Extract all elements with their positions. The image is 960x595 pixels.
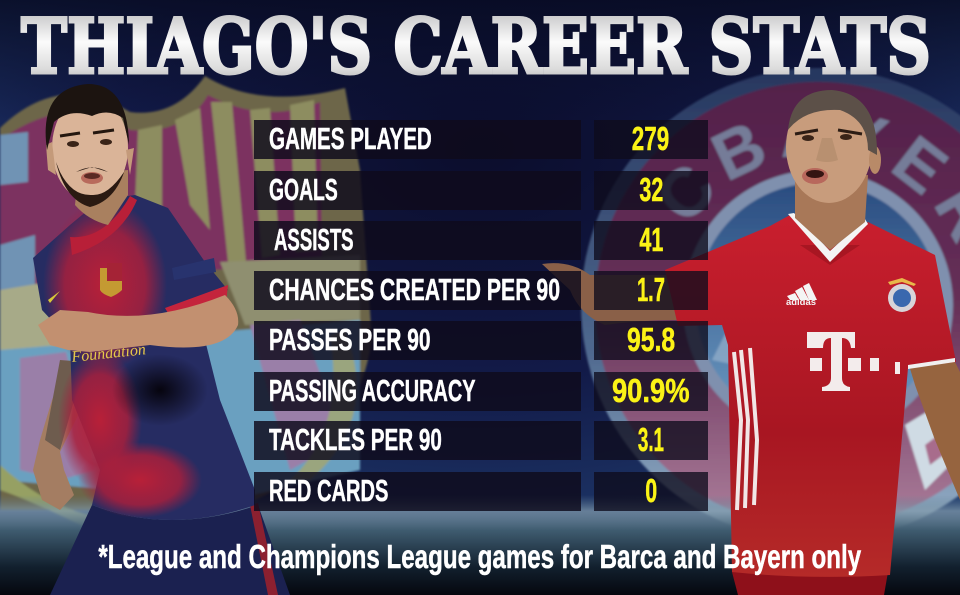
footnote: *League and Champions League games for Barca and Bayern only [99, 538, 861, 575]
value: goals [594, 171, 708, 210]
value: passes: 95.8 [627, 321, 675, 358]
telekom logo [807, 332, 855, 391]
value: tackles: 3.1 [638, 421, 664, 458]
row: games played: GAMES PLAYED [269, 121, 432, 156]
head [786, 91, 872, 203]
Bayern crest backdrop [580, 67, 960, 525]
row: tackles: TACKLES PER 90 [269, 422, 442, 457]
value: goals: 32 [639, 171, 663, 208]
kit stripes [734, 348, 757, 510]
value: tackles [594, 421, 708, 460]
bayern crest [888, 278, 916, 312]
arm [542, 263, 680, 325]
value: assists [594, 221, 708, 260]
right arm [908, 362, 960, 500]
club crest [100, 268, 122, 297]
shorts [50, 505, 290, 595]
right player [542, 90, 960, 595]
row: red cards: RED CARDS [269, 473, 388, 508]
row: assists: ASSISTS [274, 222, 354, 257]
value: chances created: 1.7 [637, 271, 665, 308]
face [52, 95, 128, 201]
left player [33, 84, 290, 595]
row: passes [254, 321, 581, 360]
row: red cards [254, 472, 581, 511]
row: chances created: CHANCES CREATED PER 90 [269, 272, 560, 307]
row: tackles [254, 421, 581, 460]
value: passing accuracy [594, 372, 708, 411]
value: assists: 41 [639, 221, 663, 258]
shirt [665, 215, 956, 577]
value: games played: 279 [632, 120, 670, 157]
value: passing accuracy: 90.9% [612, 372, 690, 409]
row: goals: GOALS [269, 172, 338, 207]
value: chances created [594, 271, 708, 310]
value: games played [594, 120, 708, 159]
Bottom stadium [0, 495, 960, 595]
row: games played [254, 120, 581, 159]
row: goals [254, 171, 581, 210]
row: assists [254, 221, 581, 260]
value: passes [594, 321, 708, 360]
sponsor text: Foundation [70, 341, 147, 366]
neck [75, 170, 128, 225]
row: passing accuracy [254, 372, 581, 411]
shirt [33, 195, 255, 520]
shorts [732, 572, 888, 595]
Barca crest backdrop [0, 76, 372, 530]
sleeve badge: respect [172, 258, 216, 280]
adidas logo: adidas [786, 297, 816, 307]
row: passes: PASSES PER 90 [269, 322, 431, 357]
adidas logo [786, 283, 817, 307]
value: red cards [594, 472, 708, 511]
stats table [254, 120, 708, 511]
right forearm [38, 295, 238, 352]
row: passing accuracy: PASSING ACCURACY [269, 373, 475, 408]
value: red cards: 0 [645, 472, 657, 509]
neck [795, 175, 868, 250]
